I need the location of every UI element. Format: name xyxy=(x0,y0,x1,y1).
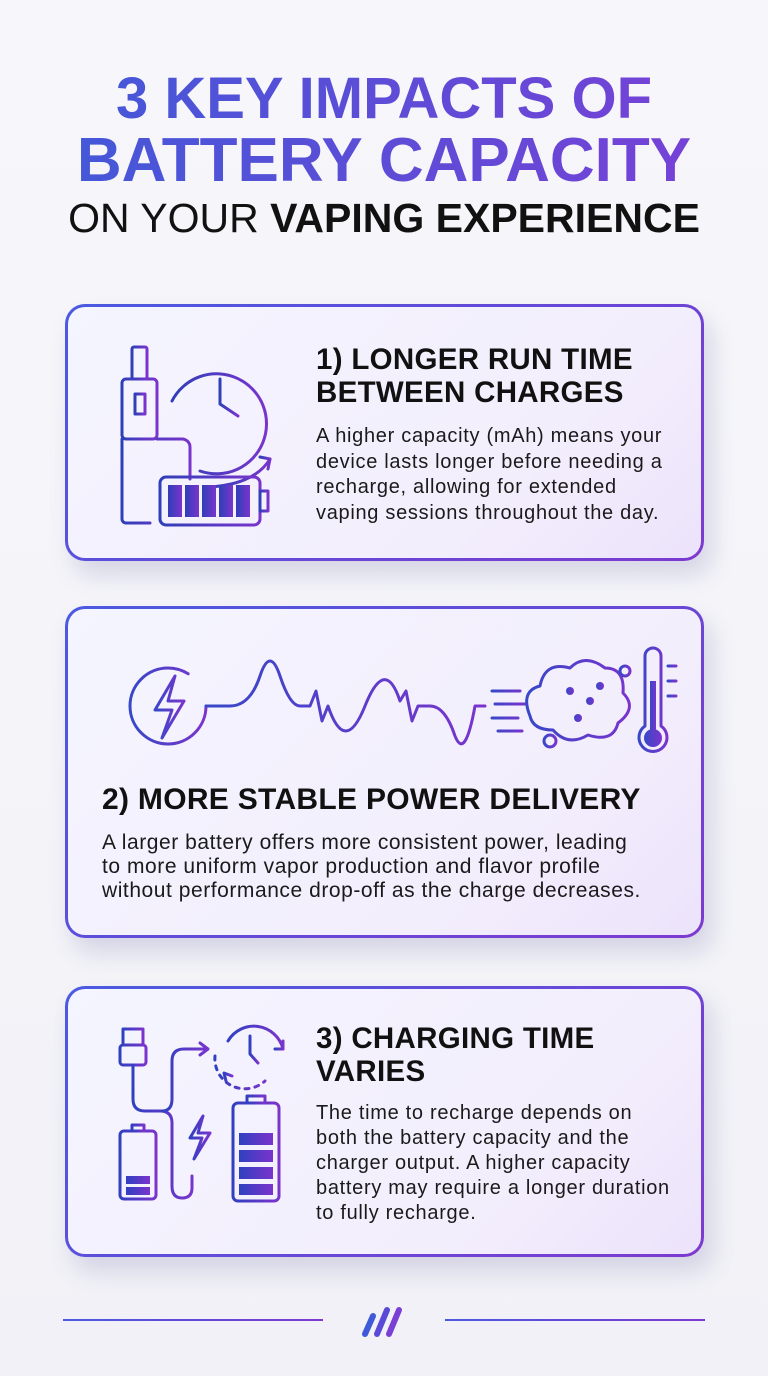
title line 1: 3 KEY IMPACTS OF xyxy=(116,66,652,131)
panel: longer run time xyxy=(65,304,704,561)
heading 3: VARIES xyxy=(316,1055,425,1088)
body 3: both the battery capacity and the xyxy=(316,1127,629,1149)
body 3: to fully recharge. xyxy=(316,1202,476,1224)
heading 3 xyxy=(316,1022,594,1088)
title line 3: ON YOUR VAPING EXPERIENCE xyxy=(68,195,700,241)
icon: usb charger, clock and batteries xyxy=(118,1024,284,1202)
heading 1: BETWEEN CHARGES xyxy=(316,376,624,409)
body 2: A larger battery offers more consistent power, leading xyxy=(102,831,627,854)
body 3: The time to recharge depends on xyxy=(316,1102,632,1124)
icon: power waveform with vapor cloud and thermometer xyxy=(128,646,678,753)
logo: slashes xyxy=(362,1307,402,1337)
body 1: device lasts longer before needing a xyxy=(316,450,663,472)
body 2 xyxy=(102,831,641,902)
title line 2: BATTERY CAPACITY xyxy=(77,126,691,195)
panel: stable power xyxy=(65,606,704,938)
body 1: vaping sessions throughout the day. xyxy=(316,502,659,524)
title line 1 xyxy=(0,68,768,130)
body 2: without performance drop-off as the charge decreases. xyxy=(102,879,641,902)
body 1: A higher capacity (mAh) means your xyxy=(316,425,662,447)
body 3: battery may require a longer duration xyxy=(316,1177,670,1199)
heading 1 xyxy=(316,343,633,409)
icon: vape device with clock and battery xyxy=(120,346,272,526)
heading 1: 1) LONGER RUN TIME xyxy=(316,343,633,376)
body 1 xyxy=(316,425,663,524)
title xyxy=(68,66,700,241)
footer divider with logo xyxy=(63,1307,705,1337)
body 2: to more uniform vapor production and flavor profile xyxy=(102,855,600,878)
body 3 xyxy=(316,1102,670,1224)
body 3: charger output. A higher capacity xyxy=(316,1152,630,1174)
body 1: recharge, allowing for extended xyxy=(316,476,617,498)
panel: charging time xyxy=(65,986,704,1257)
heading 2: 2) MORE STABLE POWER DELIVERY xyxy=(102,783,641,816)
heading 3: 3) CHARGING TIME xyxy=(316,1022,594,1055)
